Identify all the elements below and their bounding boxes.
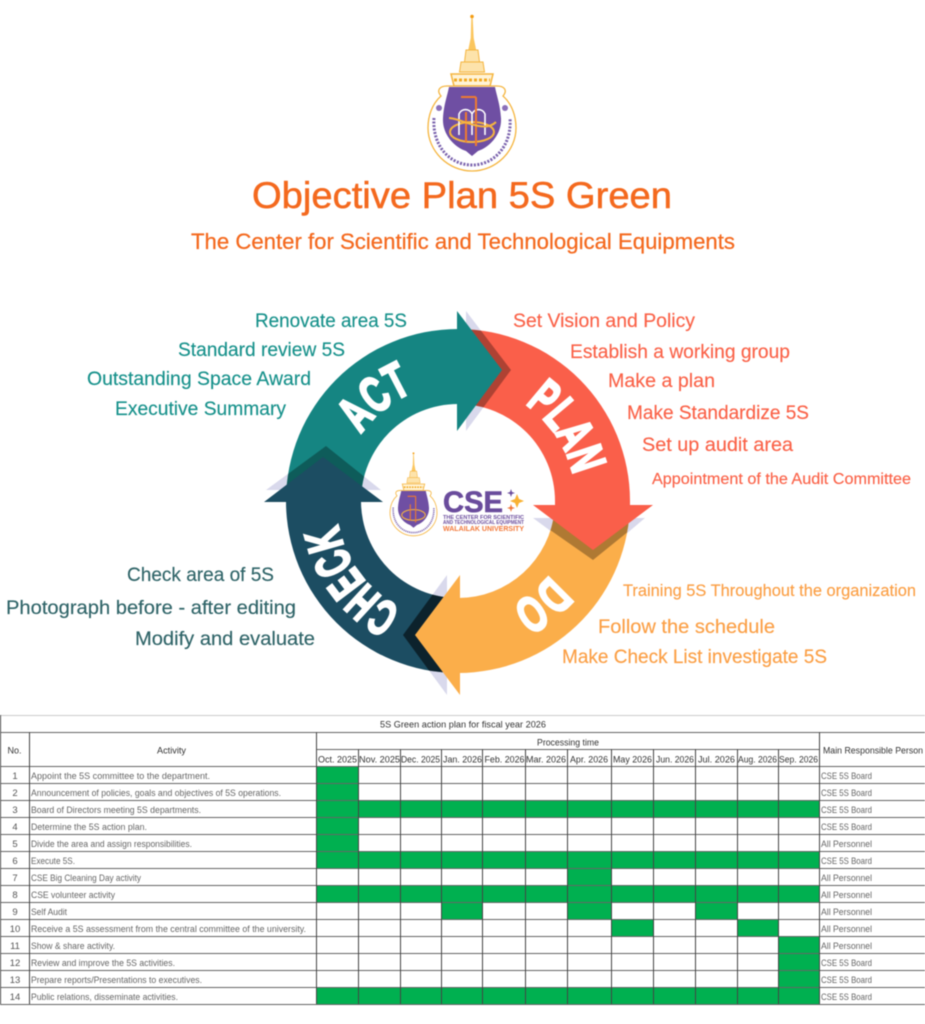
crest purple shield [443,87,501,156]
activity names: Divide the area and assign responsibilities. [31,839,192,849]
row numbers: 4 [12,822,18,833]
crest outer ring [428,86,516,171]
do item 3: Make Check List investigate 5S [562,647,827,668]
responsible persons: All Personnel [821,839,872,849]
crest spire and roof [451,15,493,86]
table grid [0,715,925,1004]
month headers: Dec. 2025 [401,754,440,764]
activity names: Determine the 5S action plan. [31,822,147,832]
check item 3: Modify and evaluate [135,629,315,650]
DO list [562,581,916,668]
row numbers: 13 [10,975,20,986]
month headers: Aug. 2026 [738,754,777,764]
CSE wordmark: CSE [443,486,503,519]
logo caption line 2: AND TECHNOLOGICAL EQUIPMENT [443,520,524,526]
arrow head: CHECK [264,457,383,502]
plan item 6: Appointment of the Audit Committee [652,471,911,488]
label: PLAN: PLAN [525,376,608,475]
activity names: Self Audit [31,907,67,917]
arrow head: DO [415,575,460,695]
act item 1: Renovate area 5S [255,311,407,332]
CHECK list [6,565,315,650]
responsible persons: All Personnel [821,907,872,917]
arrow body: DO [458,510,630,673]
responsible persons: CSE 5S Board [821,822,872,832]
row numbers: 2 [12,788,18,799]
month headers: Oct. 2025 [318,754,357,764]
row numbers: 9 [12,907,18,918]
month headers [318,754,818,764]
month headers: Jun. 2026 [656,754,694,764]
column header: responsible person: Main Responsible Person [823,746,923,756]
soft lavender arrowhead shadows [266,311,645,695]
row numbers: 5 [12,839,18,850]
plan item 5: Set up audit area [642,435,793,456]
row numbers: 6 [12,856,18,867]
plan item 3: Make a plan [608,371,715,392]
do item 1: Training 5S Throughout the organization [623,581,916,600]
responsible persons: All Personnel [821,941,872,951]
label: DO: DO [516,575,575,632]
activity names: Review and improve the 5S activities. [31,958,175,968]
ACT list [87,311,407,420]
row numbers: 1 [12,771,18,782]
activity names [31,771,306,1002]
row numbers [10,771,20,1003]
row numbers: 12 [10,958,20,969]
column header: Activity: Activity [157,746,186,756]
logo caption line 1: THE CENTER FOR SCIENTIFIC [443,515,524,521]
check item 2: Photograph before - after editing [6,598,296,619]
plan item 2: Establish a working group [570,342,790,363]
responsible persons: All Personnel [821,890,872,900]
row numbers: 7 [12,873,18,884]
crest lettering ring [434,118,510,165]
plan item 4: Make Standardize 5S [627,403,809,424]
responsible persons: CSE 5S Board [821,856,872,866]
row numbers: 11 [10,941,20,952]
title: Objective Plan 5S Green [252,175,672,216]
table title: 5S Green action plan for fiscal year 2026 [380,720,546,730]
activity names: Execute 5S. [31,856,75,866]
month headers: Apr. 2026 [570,754,608,764]
act item 4: Executive Summary [115,399,286,420]
subtitle: The Center for Scientific and Technological Equipments [191,229,735,254]
row numbers: 3 [12,805,18,816]
PDCA cycle diagram [264,310,654,696]
activity names: Receive a 5S assessment from the central committee of the university. [31,924,306,934]
row numbers: 14 [10,992,20,1003]
arrow body: PLAN [458,329,630,506]
label: CHECK: CHECK [302,522,398,636]
responsible persons: CSE 5S Board [821,992,872,1002]
responsible persons: All Personnel [821,924,872,934]
arrow body: CHECK [286,501,458,673]
responsible persons: All Personnel [821,873,872,883]
month headers: Feb. 2026 [484,754,524,764]
column header: Processing time: Processing time [537,738,599,748]
plan item 1: Set Vision and Policy [513,311,695,332]
activity names: Public relations, disseminate activities. [31,992,178,1002]
logo caption line 3: WALAILAK UNIVERSITY [443,526,524,533]
do item 2: Follow the schedule [598,617,775,638]
column header: No.: No. [8,746,22,756]
month headers: May 2026 [613,754,652,764]
activity names: CSE volunteer activity [31,890,115,900]
month headers: Mar. 2026 [526,754,566,764]
responsible persons: CSE 5S Board [821,975,872,985]
row numbers: 10 [10,924,20,935]
month headers: Jul. 2026 [698,754,735,764]
crest side flowers [436,105,508,111]
activity names: Prepare reports/Presentations to executives. [31,975,202,985]
act item 2: Standard review 5S [178,340,345,361]
gantt green bars [316,766,819,1004]
university crest logo [428,15,516,171]
arrow head: ACT [457,311,502,431]
check item 1: Check area of 5S [127,565,274,586]
row numbers: 8 [12,890,18,901]
activity names: CSE Big Cleaning Day activity [31,873,141,883]
responsible persons: CSE 5S Board [821,958,872,968]
responsible persons: CSE 5S Board [821,771,872,781]
small crest [390,452,437,536]
dark overlap shadows [286,329,629,673]
label: ACT: ACT [338,359,408,436]
responsible persons: CSE 5S Board [821,788,872,798]
activity names: Board of Directors meeting 5S departments. [31,805,201,815]
arrow body: ACT [286,329,458,501]
activity names: Show & share activity. [31,941,115,951]
action plan table [0,715,925,1004]
arrow head: PLAN [533,505,653,550]
act item 3: Outstanding Space Award [87,369,311,390]
month headers: Jan. 2026 [443,754,482,764]
PLAN list [513,311,911,488]
month headers: Sep. 2026 [779,754,818,764]
activity names: Announcement of policies, goals and objectives of 5S operations. [31,788,281,798]
CSE center logo [390,452,524,536]
responsible persons [821,771,872,1002]
activity names: Appoint the 5S committee to the department. [31,771,210,781]
responsible persons: CSE 5S Board [821,805,872,815]
crest monogram [449,97,496,146]
month headers: Nov. 2025 [359,754,400,764]
spark icons [507,489,524,512]
